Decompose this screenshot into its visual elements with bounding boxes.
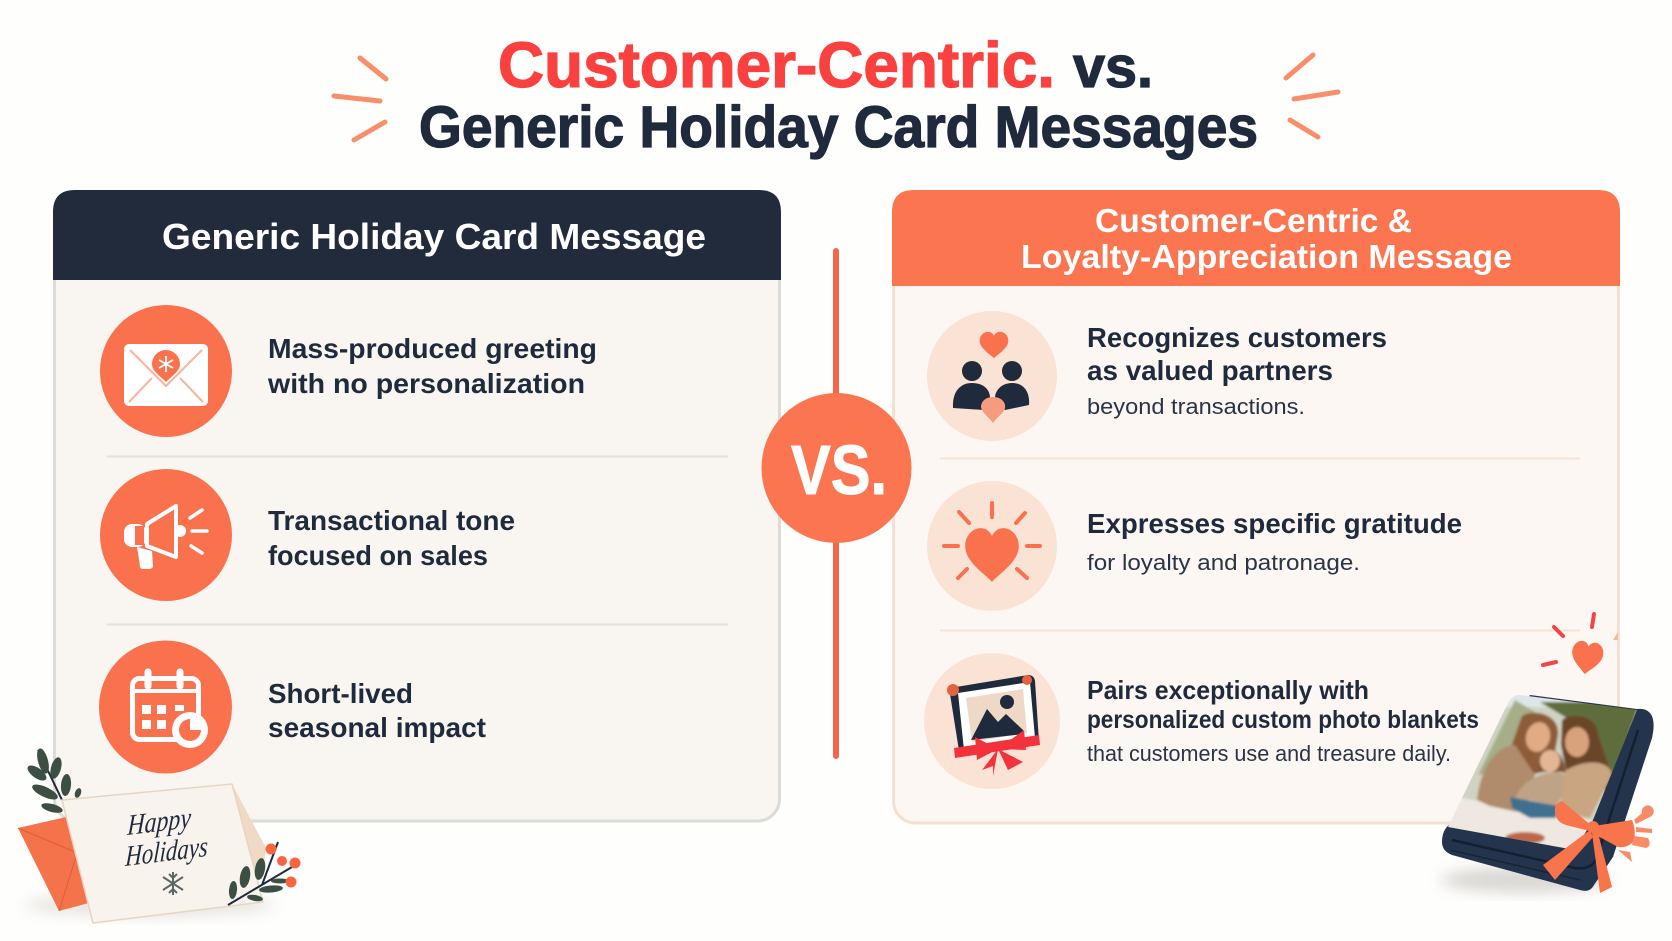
illustration: happy holidays card bbox=[18, 747, 300, 923]
vs badge bbox=[762, 393, 912, 543]
text: pairs with photo blankets: personalized custom photo blankets bbox=[1087, 706, 1479, 734]
icon: left title burst bbox=[334, 58, 386, 140]
title: Generic Holiday Card Messages bbox=[419, 95, 1258, 160]
blanket body bbox=[1442, 695, 1654, 891]
child bbox=[1538, 751, 1566, 772]
icon: envelope bbox=[100, 305, 232, 437]
title: vs. bbox=[1073, 35, 1153, 100]
envelope bbox=[18, 815, 100, 911]
item: recognizes customers bbox=[927, 311, 1387, 441]
card back bbox=[232, 784, 266, 880]
icon: radiant heart bbox=[927, 481, 1057, 611]
item: mass-produced greeting bbox=[100, 305, 597, 437]
text: short-lived: seasonal impact bbox=[268, 712, 486, 743]
panel header: customer-centric bbox=[892, 190, 1620, 286]
text: pairs with photo blankets: Pairs exceptionally with bbox=[1087, 675, 1369, 705]
icon: framed photo with bow bbox=[924, 653, 1060, 789]
item: pairs with photo blankets bbox=[924, 653, 1479, 789]
card greeting bbox=[124, 802, 209, 873]
title bbox=[419, 29, 1258, 160]
text: transactional tone bbox=[268, 505, 515, 571]
icon: calendar bbox=[99, 640, 232, 774]
card front bbox=[62, 784, 263, 923]
illustration: folded photo blanket with bow bbox=[1440, 690, 1654, 893]
text: transactional tone: focused on sales bbox=[268, 540, 488, 571]
ribbon bow bbox=[1543, 801, 1654, 893]
card greeting: Holidays bbox=[124, 831, 209, 873]
text: recognizes customers: beyond transactions. bbox=[1087, 394, 1305, 419]
woman bbox=[1510, 713, 1558, 778]
panel: customer-centric and loyalty message bbox=[892, 190, 1620, 823]
text: recognizes customers: Recognizes customers bbox=[1087, 322, 1387, 353]
card greeting: Happy bbox=[126, 802, 192, 842]
heading: customer-centric: Customer-Centric & bbox=[1095, 202, 1412, 239]
heading: customer-centric: Loyalty-Appreciation Message bbox=[1021, 238, 1512, 275]
panel: generic holiday card message bbox=[53, 190, 781, 821]
item: short-lived bbox=[99, 640, 486, 774]
text: expresses specific gratitude: for loyalty and patronage. bbox=[1087, 550, 1360, 575]
icon: snowflake bbox=[163, 872, 183, 895]
title: Customer-Centric. bbox=[498, 29, 1055, 101]
item: expresses specific gratitude bbox=[927, 481, 1462, 611]
text: expresses specific gratitude: Expresses specific gratitude bbox=[1087, 508, 1462, 539]
text: mass-produced greeting: Mass-produced greeting bbox=[268, 333, 597, 364]
vs badge: VS. bbox=[791, 431, 887, 509]
text: mass-produced greeting bbox=[267, 333, 597, 399]
snow ground bbox=[1448, 797, 1592, 848]
item: transactional tone bbox=[100, 469, 515, 601]
text: expresses specific gratitude bbox=[1087, 508, 1462, 575]
icon: megaphone bbox=[100, 469, 232, 601]
man bbox=[1560, 715, 1610, 772]
icon: partners with hearts bbox=[927, 311, 1057, 441]
center divider bbox=[833, 248, 839, 759]
heading: customer-centric bbox=[1021, 202, 1512, 275]
top-left leaves bbox=[25, 747, 83, 815]
berry branch bbox=[228, 842, 300, 905]
text: short-lived: Short-lived bbox=[268, 678, 413, 709]
icon: right title burst bbox=[1286, 55, 1338, 137]
text: pairs with photo blankets: that customers use and treasure daily. bbox=[1087, 741, 1451, 766]
text: mass-produced greeting: with no personalization bbox=[267, 368, 585, 399]
text: recognizes customers: as valued partners bbox=[1087, 355, 1333, 386]
icon: floating heart bbox=[1543, 614, 1618, 676]
text: recognizes customers bbox=[1087, 322, 1387, 419]
heading: generic: Generic Holiday Card Message bbox=[162, 216, 706, 257]
text: short-lived bbox=[268, 678, 486, 743]
text: pairs with photo blankets bbox=[1087, 675, 1479, 766]
panel header: generic bbox=[53, 190, 781, 280]
family photo bbox=[1448, 695, 1637, 848]
text: transactional tone: Transactional tone bbox=[268, 505, 515, 536]
